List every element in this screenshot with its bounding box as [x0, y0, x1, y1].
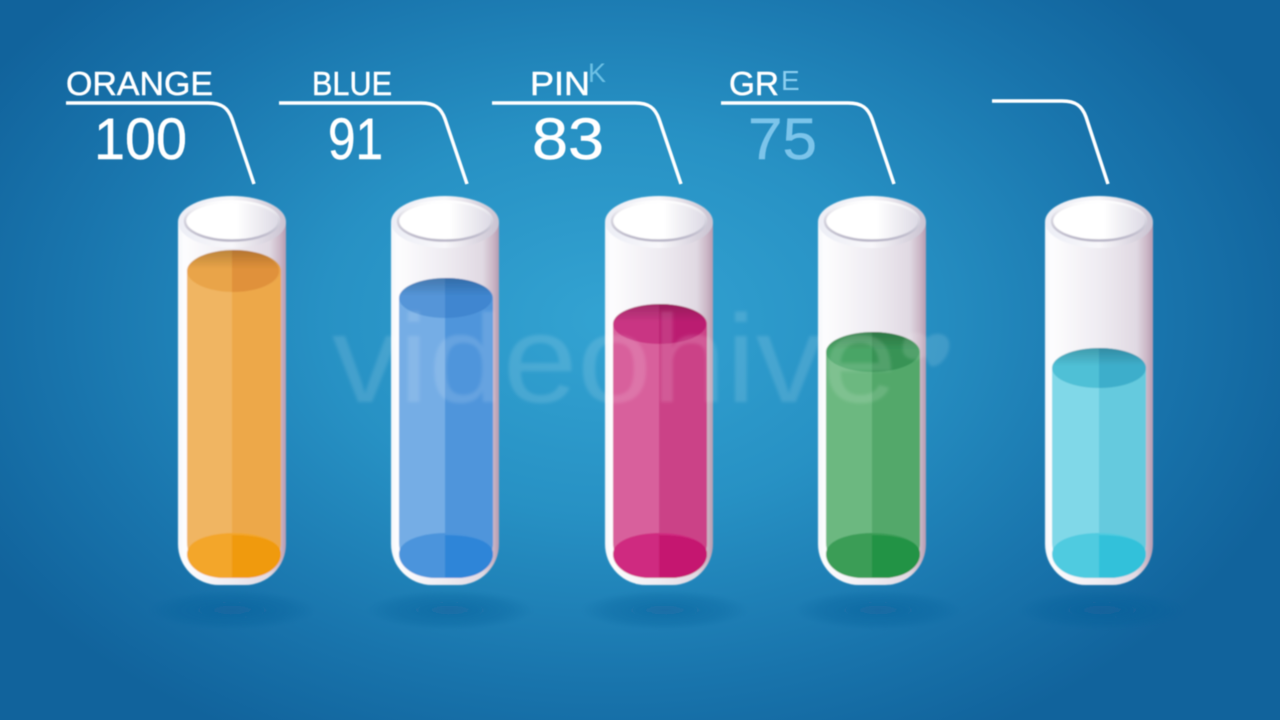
opening — [825, 202, 919, 240]
rim — [391, 196, 499, 248]
liquid — [399, 298, 493, 578]
value: 91 — [328, 107, 383, 172]
shadow — [148, 590, 316, 630]
label: ORANGE — [66, 65, 213, 102]
liquid right shade — [1099, 368, 1146, 578]
callout: orange — [66, 65, 254, 184]
opening — [398, 202, 492, 240]
liquid — [613, 324, 707, 578]
liquid — [1052, 368, 1146, 578]
liquid bottom — [613, 533, 707, 578]
label: PIN — [530, 65, 590, 102]
liquid bottom — [187, 533, 281, 578]
callout: green — [721, 65, 894, 184]
opening — [1052, 202, 1146, 240]
label: BLUE — [312, 65, 392, 102]
glass body — [178, 222, 286, 585]
value: 100 — [94, 107, 187, 172]
liquid bottom — [826, 533, 920, 578]
rim — [818, 196, 926, 248]
label: GR — [729, 65, 779, 102]
liquid right shade — [445, 298, 493, 578]
fading letter: E — [781, 65, 800, 96]
shadow — [1018, 590, 1186, 630]
glass body — [818, 222, 926, 585]
leader line — [492, 103, 681, 184]
liquid surface — [613, 304, 707, 344]
liquid right shade — [872, 352, 920, 578]
glass body — [1045, 222, 1153, 585]
callout: pink — [492, 58, 681, 184]
liquid surface — [826, 332, 920, 372]
opening — [612, 202, 706, 240]
tube: orange — [148, 196, 316, 630]
liquid surface — [1052, 348, 1146, 388]
liquid — [826, 352, 920, 578]
liquid bottom — [399, 533, 493, 578]
glass body — [605, 222, 713, 585]
opening — [185, 202, 279, 240]
leader line — [721, 103, 894, 184]
liquid surface — [399, 278, 493, 318]
rim — [178, 196, 286, 248]
watermark: videohive — [332, 290, 897, 429]
tube: pink — [581, 196, 749, 630]
shadow — [366, 590, 534, 630]
rim — [1045, 196, 1153, 248]
liquid surface — [187, 250, 281, 292]
value: 75 — [748, 107, 817, 172]
liquid right shade — [659, 324, 707, 578]
callout: blue — [279, 65, 467, 184]
tube: blue — [366, 196, 534, 630]
liquid — [187, 270, 281, 578]
tube: cyan — [1018, 196, 1186, 630]
fading letter: K — [588, 58, 606, 88]
liquid right shade — [232, 270, 281, 578]
watermark logo — [903, 333, 949, 366]
tube: green — [794, 196, 962, 630]
rim — [605, 196, 713, 248]
callout: cyan leader line — [992, 101, 1108, 184]
leader line — [279, 103, 467, 184]
leader line — [66, 103, 254, 184]
glass body — [391, 222, 499, 585]
shadow — [581, 590, 749, 630]
value: 83 — [532, 107, 604, 172]
liquid bottom — [1052, 533, 1146, 578]
shadow — [794, 590, 962, 630]
